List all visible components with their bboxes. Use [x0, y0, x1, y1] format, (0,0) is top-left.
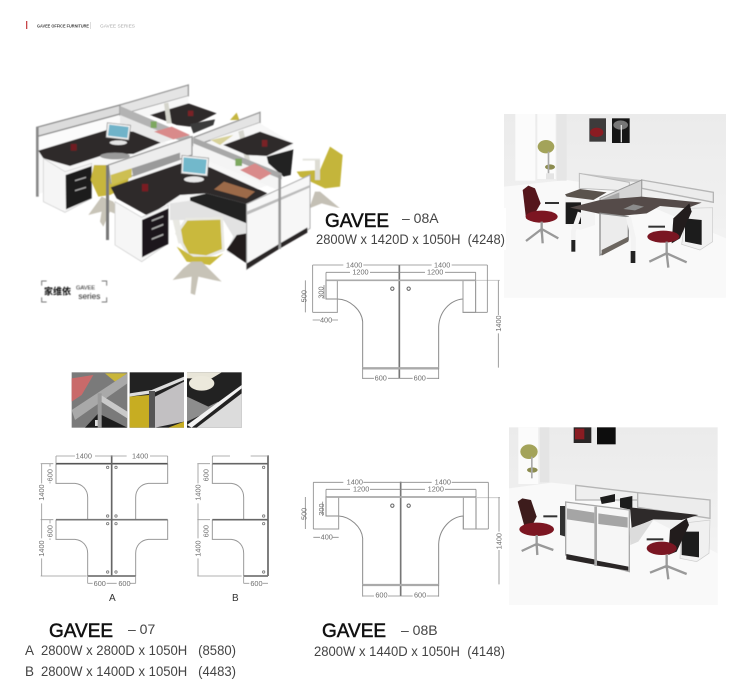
wall art [574, 427, 591, 443]
right chair [668, 518, 689, 555]
title: GAVEE 08A: GAVEE [325, 211, 389, 232]
plan drawing 08A: 1400 [346, 260, 362, 269]
title: GAVEE 08A: 2800W x 1420D x 1050H (4248) [316, 232, 505, 247]
partition frames [579, 173, 642, 182]
detail: partition junction [72, 372, 127, 428]
plan A: 600 [94, 579, 106, 588]
rear frame panels [576, 485, 638, 500]
white desk legs [573, 212, 580, 252]
plant [538, 140, 554, 153]
front left partition [108, 137, 192, 183]
plan drawing 08A: 600 [414, 373, 426, 382]
plan A: 600 [118, 579, 131, 588]
front desk [111, 163, 267, 216]
title: GAVEE 08B with sizes: GAVEE [322, 621, 386, 642]
plan labels A and B: A [109, 593, 116, 604]
front pedestal [115, 202, 168, 262]
partition with slats [600, 180, 642, 213]
rear panels [37, 105, 293, 213]
detail: desk edge [187, 372, 242, 428]
plan drawing 08B: 500 [300, 508, 309, 520]
white background behind 08A title [316, 208, 506, 250]
header breadcrumb: GAVEE SERIES [100, 24, 135, 28]
plan drawing 08B: 300 [317, 503, 326, 516]
logo: 家维依 [44, 286, 71, 297]
logo [42, 281, 107, 302]
plan A: 1400 [76, 452, 92, 461]
plan labels A and B [109, 593, 239, 604]
photo: GAVEE-08B room scene [509, 427, 718, 605]
plan drawing 08B: 1200 [428, 485, 444, 494]
plan drawing 08B: 1400 [347, 477, 363, 486]
right yellow chair [297, 147, 343, 188]
rear left chair [91, 165, 130, 197]
plan A: 600 [45, 525, 54, 537]
left chair [518, 498, 537, 528]
plan labels A and B: B [232, 593, 239, 604]
title: GAVEE 07 with sizes: GAVEE [49, 621, 113, 642]
plan A: 1400 [37, 484, 46, 501]
plan A [37, 452, 168, 588]
plan B: 600 [201, 525, 210, 537]
rear left desk [38, 130, 161, 166]
rear right desk [150, 103, 217, 127]
title: GAVEE 07 with sizes [25, 621, 236, 679]
header breadcrumb [26, 21, 135, 29]
plant [520, 444, 538, 459]
plan drawing 08B: 1400 [495, 533, 504, 549]
title: GAVEE 07 with sizes: – 07 [128, 621, 155, 637]
plan drawing 08B: 600 [375, 591, 388, 600]
plan drawing 08B: 600 [414, 591, 426, 600]
front partitions [566, 502, 629, 572]
logo: series [78, 291, 101, 301]
front panel [600, 213, 628, 255]
plan drawing 08A: 500 [300, 290, 309, 302]
left chair [523, 186, 541, 220]
desk top [570, 197, 702, 217]
plan drawing 08B: 400 [321, 532, 333, 541]
title: GAVEE 08A [316, 210, 505, 247]
photo: GAVEE-08A room scene [504, 114, 726, 298]
plan drawing 08A: 600 [375, 373, 387, 382]
plan drawing 08A: 1400 [434, 260, 450, 269]
plan B: 1400 [193, 540, 202, 557]
desk [630, 507, 698, 528]
right pedestal [680, 520, 710, 562]
title: GAVEE 08A: – 08A [402, 210, 439, 226]
plan drawing 08A: 1200 [427, 267, 443, 276]
header breadcrumb: GAVEE OFFICE FURNITURE [37, 24, 89, 28]
plan drawing 07 A and B [37, 452, 268, 588]
wall art [589, 118, 606, 142]
title: GAVEE 07 with sizes: 2800W x 1400D x 1050H (4483) [41, 664, 236, 679]
central partition [120, 106, 193, 146]
title: GAVEE 07 with sizes: B [25, 664, 34, 679]
plan drawing 08A: 1200 [352, 267, 369, 276]
right chair [672, 203, 692, 243]
right pedestal [682, 208, 713, 250]
front yellow chair [177, 218, 223, 257]
plan drawing 08B: 1400 [435, 477, 451, 486]
under desk area [170, 201, 247, 262]
detail photos [72, 372, 242, 428]
title: GAVEE 08B with sizes: – 08B [401, 622, 438, 638]
title: GAVEE 08B with sizes: 2800W x 1440D x 1050H (4148) [314, 644, 505, 659]
under desk shelf and end panels [227, 233, 247, 263]
rear left monitor [106, 123, 131, 140]
plan A: 1400 [132, 452, 148, 461]
plan B: 600 [250, 579, 263, 588]
title: GAVEE 07 with sizes: A [25, 643, 34, 658]
right back panel [194, 112, 260, 146]
plan drawing 08A [300, 260, 503, 382]
plan drawing 08B [300, 477, 504, 600]
plan B [193, 455, 268, 588]
logo: GAVEE [76, 286, 95, 292]
title: GAVEE 08B with sizes [314, 621, 505, 659]
plan drawing 08B: 1200 [353, 485, 369, 494]
front right partition [193, 137, 282, 192]
title: GAVEE 07 with sizes: 2800W x 2800D x 1050H (8580) [41, 643, 236, 658]
photo: four-person workstation GAVEE-07 [36, 85, 343, 302]
plan drawing 08A: 1400 [494, 315, 503, 332]
front monitor [181, 155, 209, 176]
left pedestal [565, 194, 595, 230]
plan B: 1400 [193, 484, 202, 501]
right desk [223, 132, 293, 156]
detail: panel corner [130, 372, 184, 428]
plan A: 1400 [37, 540, 46, 557]
plan drawing 08A: 300 [316, 286, 325, 299]
plan B: 600 [201, 469, 210, 481]
plan drawing 08A: 400 [320, 315, 332, 324]
plan A: 600 [45, 469, 54, 481]
